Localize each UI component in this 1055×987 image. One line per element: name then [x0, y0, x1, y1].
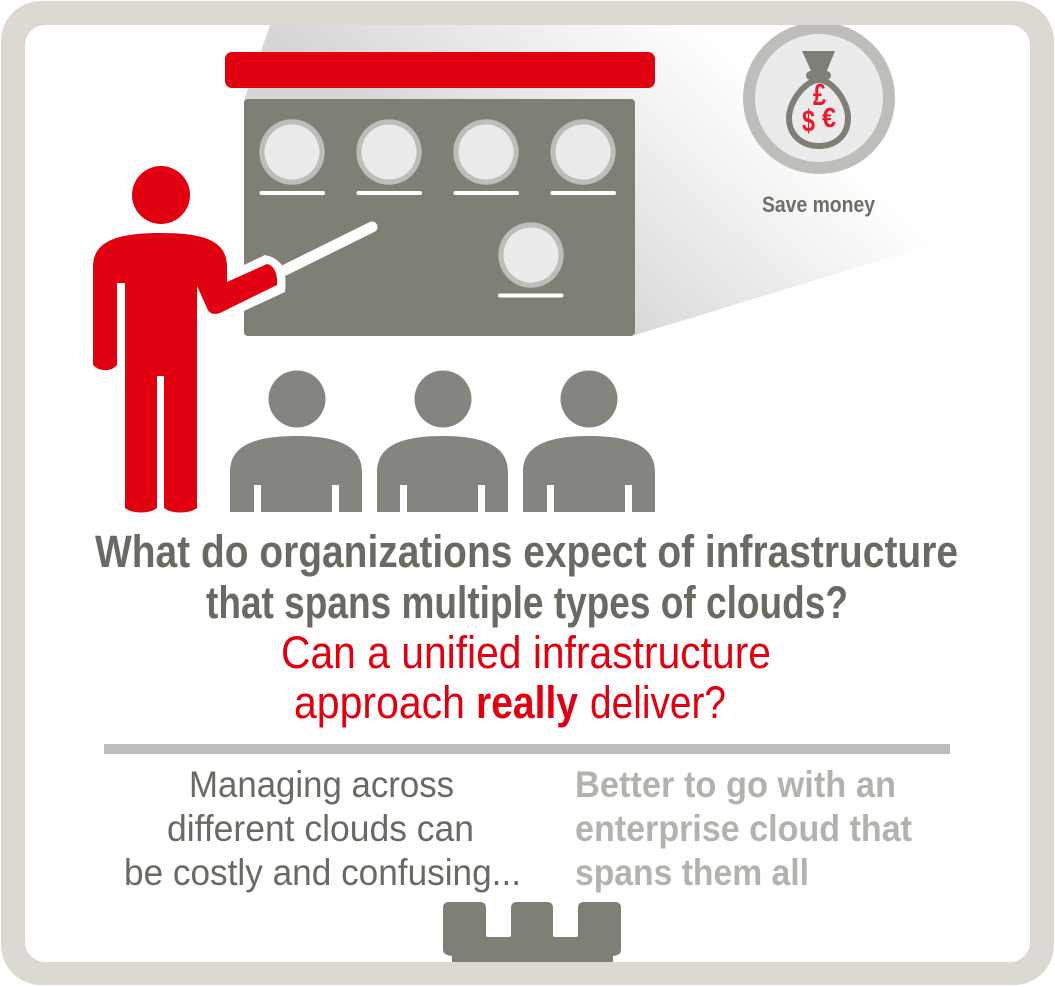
- right statement: Better to go with an: [575, 764, 896, 805]
- red subheading: approach: [294, 677, 465, 728]
- red subheading: Can a unified infrastructure: [281, 627, 771, 678]
- audience member 1: [230, 370, 362, 512]
- left statement: be costly and confusing...: [124, 852, 521, 893]
- audience member 3: [523, 370, 655, 512]
- presentation board: [244, 99, 635, 336]
- right statement: [575, 764, 912, 893]
- audience member 2: [377, 370, 508, 512]
- label: save money: Save money: [762, 192, 876, 217]
- board item 3: [453, 119, 519, 195]
- right statement: enterprise cloud that: [575, 808, 912, 849]
- projector light beam: [244, 25, 1030, 335]
- icon: money bag badge: €: [822, 102, 836, 133]
- icon: base block: [443, 902, 621, 964]
- heading: that spans multiple types of clouds?: [206, 577, 848, 628]
- presenter with pointer: [93, 166, 372, 512]
- icon: money bag badge: $: [802, 103, 815, 138]
- board item 5: [498, 222, 564, 298]
- icon: money bag badge: £: [813, 77, 826, 112]
- board item 1: [259, 119, 325, 195]
- red subheading: deliver?: [590, 677, 726, 728]
- board item 2: [356, 119, 422, 195]
- left statement: [124, 764, 521, 893]
- left statement: different clouds can: [167, 808, 474, 849]
- red subheading: really: [476, 677, 578, 728]
- icon: money bag badge: [743, 22, 895, 174]
- red title bar: [225, 52, 655, 88]
- heading: [95, 526, 958, 628]
- red subheading: [281, 627, 771, 728]
- board item 4: [550, 119, 616, 195]
- left statement: Managing across: [189, 764, 454, 805]
- right statement: spans them all: [575, 852, 809, 893]
